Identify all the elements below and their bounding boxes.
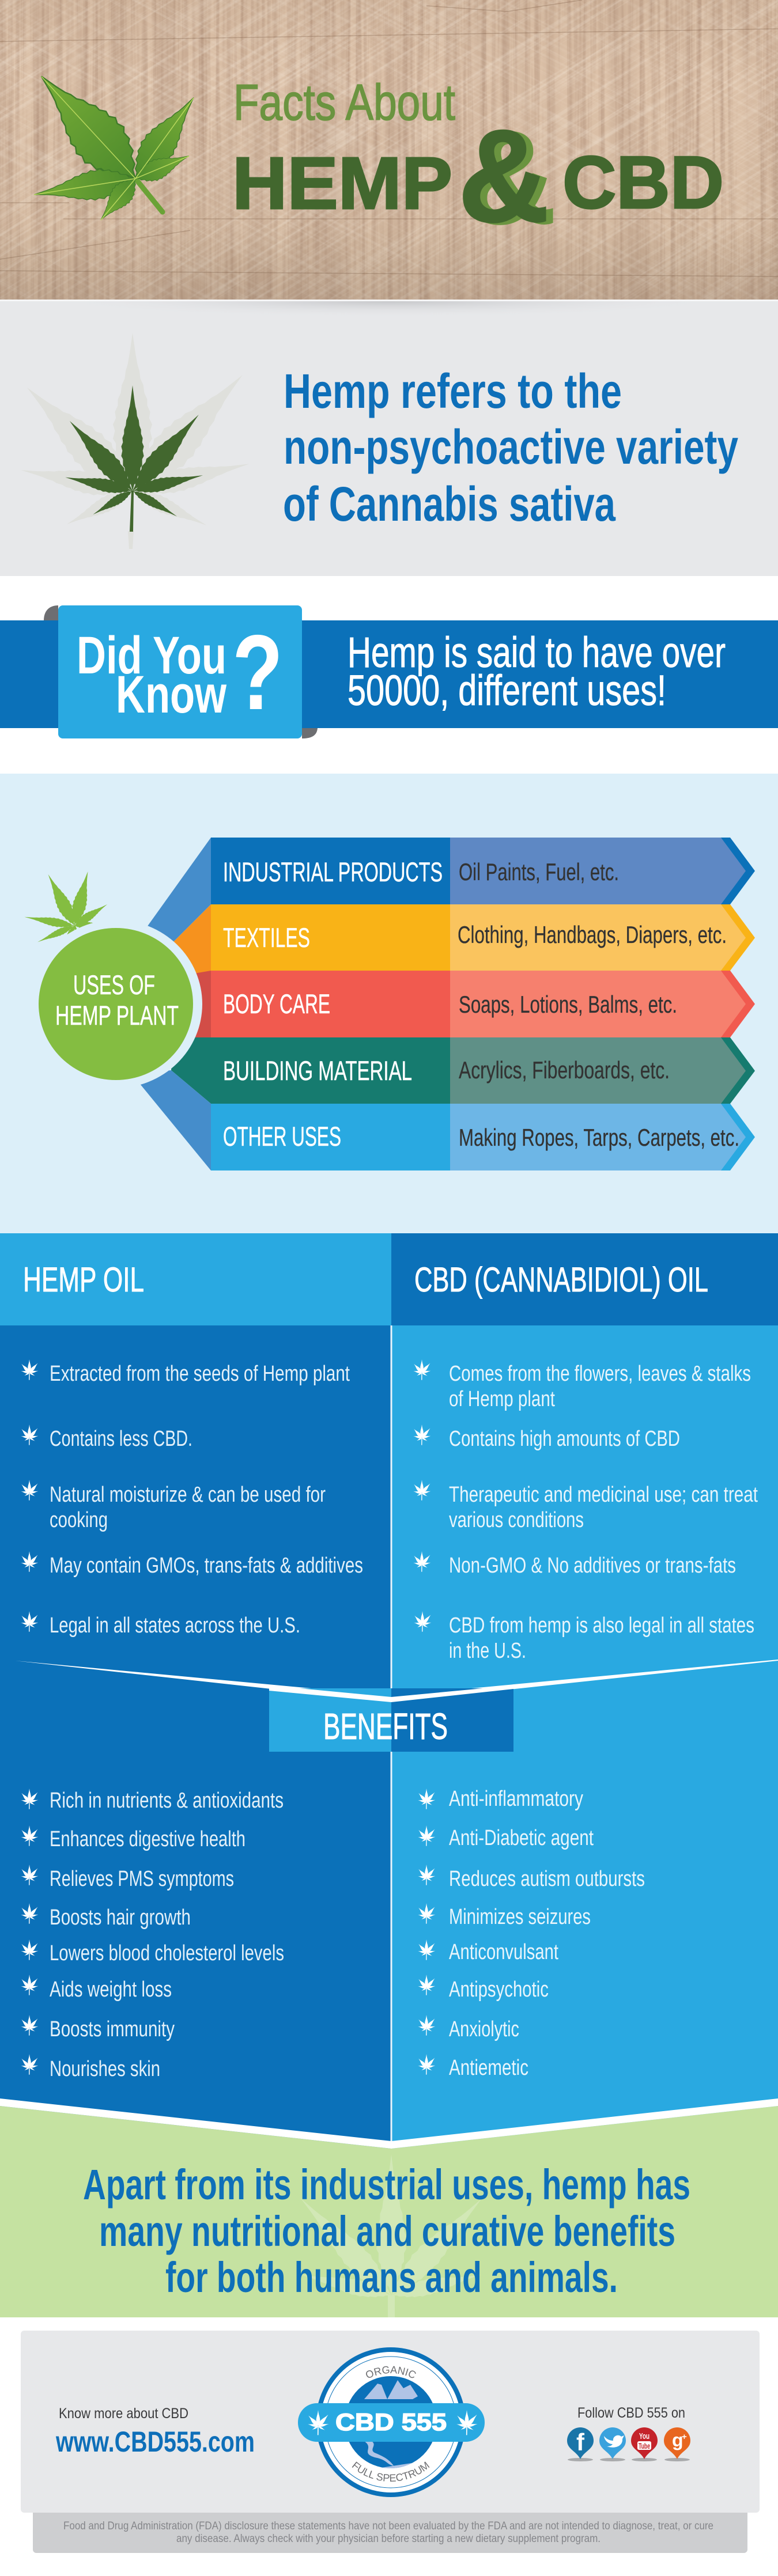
logo banner (298, 2403, 485, 2442)
row: building material: BUILDING MATERIAL (223, 1055, 412, 1086)
icon: youtube pin: Tube (639, 2441, 650, 2450)
row: industrial products: INDUSTRIAL PRODUCTS (223, 857, 443, 887)
title: Facts About: Facts About (233, 74, 455, 131)
logo banner: CBD 555 (335, 2408, 447, 2435)
title: HEMP & CBD: & (458, 103, 549, 249)
list: cbd oil benefits: Anti-Diabetic agent (449, 1826, 594, 1850)
disclaimer panel: any disease. Always check with your physician before starting a new dietary supplement program. (176, 2533, 601, 2545)
list: cbd oil facts: of Hemp plant (449, 1387, 555, 1411)
list: cbd oil benefits: Anticonvulsant (449, 1940, 558, 1964)
list: hemp oil facts: cooking (50, 1508, 108, 1532)
header: hemp oil (0, 1233, 391, 1325)
disclaimer panel (33, 2500, 747, 2553)
footer panel (21, 2331, 760, 2513)
list: cbd oil benefits: Minimizes seizures (449, 1905, 591, 1929)
uses circle (39, 928, 193, 1080)
panel: uses of hemp plant (0, 774, 778, 1233)
list: cbd oil benefits (417, 1787, 645, 2080)
closing text (83, 2161, 690, 2301)
icon: google plus pin (664, 2427, 690, 2461)
list: cbd oil benefits: Anxiolytic (449, 2017, 519, 2041)
definition text: Hemp refers to the (284, 364, 622, 418)
uses circle: HEMP PLANT (55, 1000, 179, 1031)
list: cbd oil benefits: Antipsychotic (449, 1978, 549, 2002)
list: cbd oil benefits: Anti-inflammatory (449, 1787, 583, 1811)
did you know fact (348, 628, 726, 714)
list: cbd oil facts: various conditions (449, 1508, 584, 1532)
row: body care: BODY CARE (223, 988, 330, 1019)
row: textiles: TEXTILES (223, 922, 310, 953)
list: hemp oil benefits: Enhances digestive health (50, 1827, 246, 1851)
panel: closing statement (0, 2098, 778, 2317)
list: hemp oil facts: Contains less CBD. (50, 1427, 192, 1451)
icon: twitter pin (599, 2427, 626, 2461)
row: building material: Acrylics, Fiberboards, etc. (459, 1056, 670, 1084)
ORGANIC arc label: ORGANIC (366, 2366, 416, 2378)
row: body care (211, 971, 755, 1037)
panel: did you know banner (0, 605, 778, 738)
list: hemp oil facts (20, 1359, 363, 1638)
benefits heading (269, 1685, 513, 1752)
icon: dark green leaf (62, 385, 207, 532)
icon: google plus pin: g (672, 2430, 683, 2450)
icon: small green leaf (24, 870, 109, 949)
did you know heading: Know (116, 665, 226, 724)
list: hemp oil benefits: Lowers blood cholesterol levels (50, 1941, 284, 1965)
list: hemp oil facts: Legal in all states across the U.S. (50, 1613, 300, 1638)
header: cbd oil (391, 1233, 778, 1325)
ring around circle (29, 920, 202, 1088)
icon: pale background leaf (13, 333, 257, 549)
know more text: www.CBD555.com (55, 2426, 255, 2458)
list: cbd oil benefits: Antiemetic (449, 2056, 528, 2080)
icon: pale watermark leaf (292, 2154, 491, 2317)
benefits heading: BENEFITS (323, 1706, 448, 1747)
list: cbd oil benefits: Reduces autism outbursts (449, 1867, 645, 1891)
list: hemp oil benefits: Relieves PMS symptoms (50, 1867, 234, 1891)
row: textiles (211, 904, 755, 971)
header: hemp oil: HEMP OIL (23, 1260, 144, 1299)
row: other uses (211, 1104, 755, 1170)
row: other uses: OTHER USES (223, 1121, 341, 1151)
list: hemp oil facts: Natural moisturize & can be used for (50, 1483, 326, 1507)
panel: hemp oil vs cbd oil (0, 1233, 778, 2149)
list: hemp oil benefits: Rich in nutrients & antioxidants (50, 1789, 284, 1813)
title: HEMP & CBD: HEMP (232, 142, 452, 225)
closing text: for both humans and animals. (165, 2253, 618, 2301)
icon: facebook pin: f (576, 2429, 585, 2456)
list: hemp oil benefits (20, 1789, 284, 2081)
list: hemp oil benefits: Boosts hair growth (50, 1906, 191, 1930)
title: HEMP & CBD: & (465, 105, 556, 251)
list: hemp oil benefits: Nourishes skin (50, 2057, 160, 2081)
list: hemp oil facts: May contain GMOs, trans-fats & additives (50, 1554, 363, 1578)
definition text (283, 364, 738, 531)
icon: photo cannabis leaf (22, 58, 207, 226)
list: cbd oil facts (413, 1359, 758, 1663)
drop shadow under header (220, 301, 559, 309)
follow label: Follow CBD 555 on (577, 2405, 685, 2421)
title: HEMP & CBD (232, 103, 724, 251)
did you know fact: 50000, different uses! (348, 666, 666, 714)
list: cbd oil facts: Contains high amounts of CBD (449, 1427, 680, 1451)
white chevron divider (15, 1660, 778, 1702)
icon: google plus pin: + (682, 2432, 687, 2442)
row: building material (211, 1037, 755, 1104)
row: body care: Soaps, Lotions, Balms, etc. (459, 991, 677, 1018)
connector wedges (133, 838, 211, 1170)
FULL SPECTRUM arc label: FULL SPECTRUM (352, 2461, 430, 2482)
title: HEMP & CBD: CBD (562, 141, 724, 224)
know more text: Know more about CBD (59, 2405, 188, 2422)
know more text (55, 2405, 255, 2458)
panel: hemp definition (0, 285, 778, 576)
did you know heading (77, 613, 283, 732)
icon: youtube pin (631, 2427, 658, 2461)
icon: youtube pin: You (639, 2431, 649, 2441)
white chevron edge (0, 2098, 778, 2149)
header: wood panel (0, 0, 778, 300)
list: hemp oil facts: Extracted from the seeds of Hemp plant (50, 1362, 350, 1386)
list: hemp oil benefits: Boosts immunity (50, 2017, 175, 2041)
did you know heading: Did You (77, 626, 226, 685)
logo: CBD 555 badge (298, 2347, 485, 2497)
icon: facebook pin (567, 2427, 594, 2461)
definition text: of Cannabis sativa (283, 477, 616, 531)
list: hemp oil benefits: Aids weight loss (50, 1978, 172, 2002)
row: industrial products (211, 838, 755, 904)
did you know heading: ? (232, 613, 283, 732)
uses circle: USES OF (73, 969, 155, 1000)
list: cbd oil facts: in the U.S. (449, 1639, 526, 1663)
row: industrial products: Oil Paints, Fuel, etc. (459, 858, 619, 885)
